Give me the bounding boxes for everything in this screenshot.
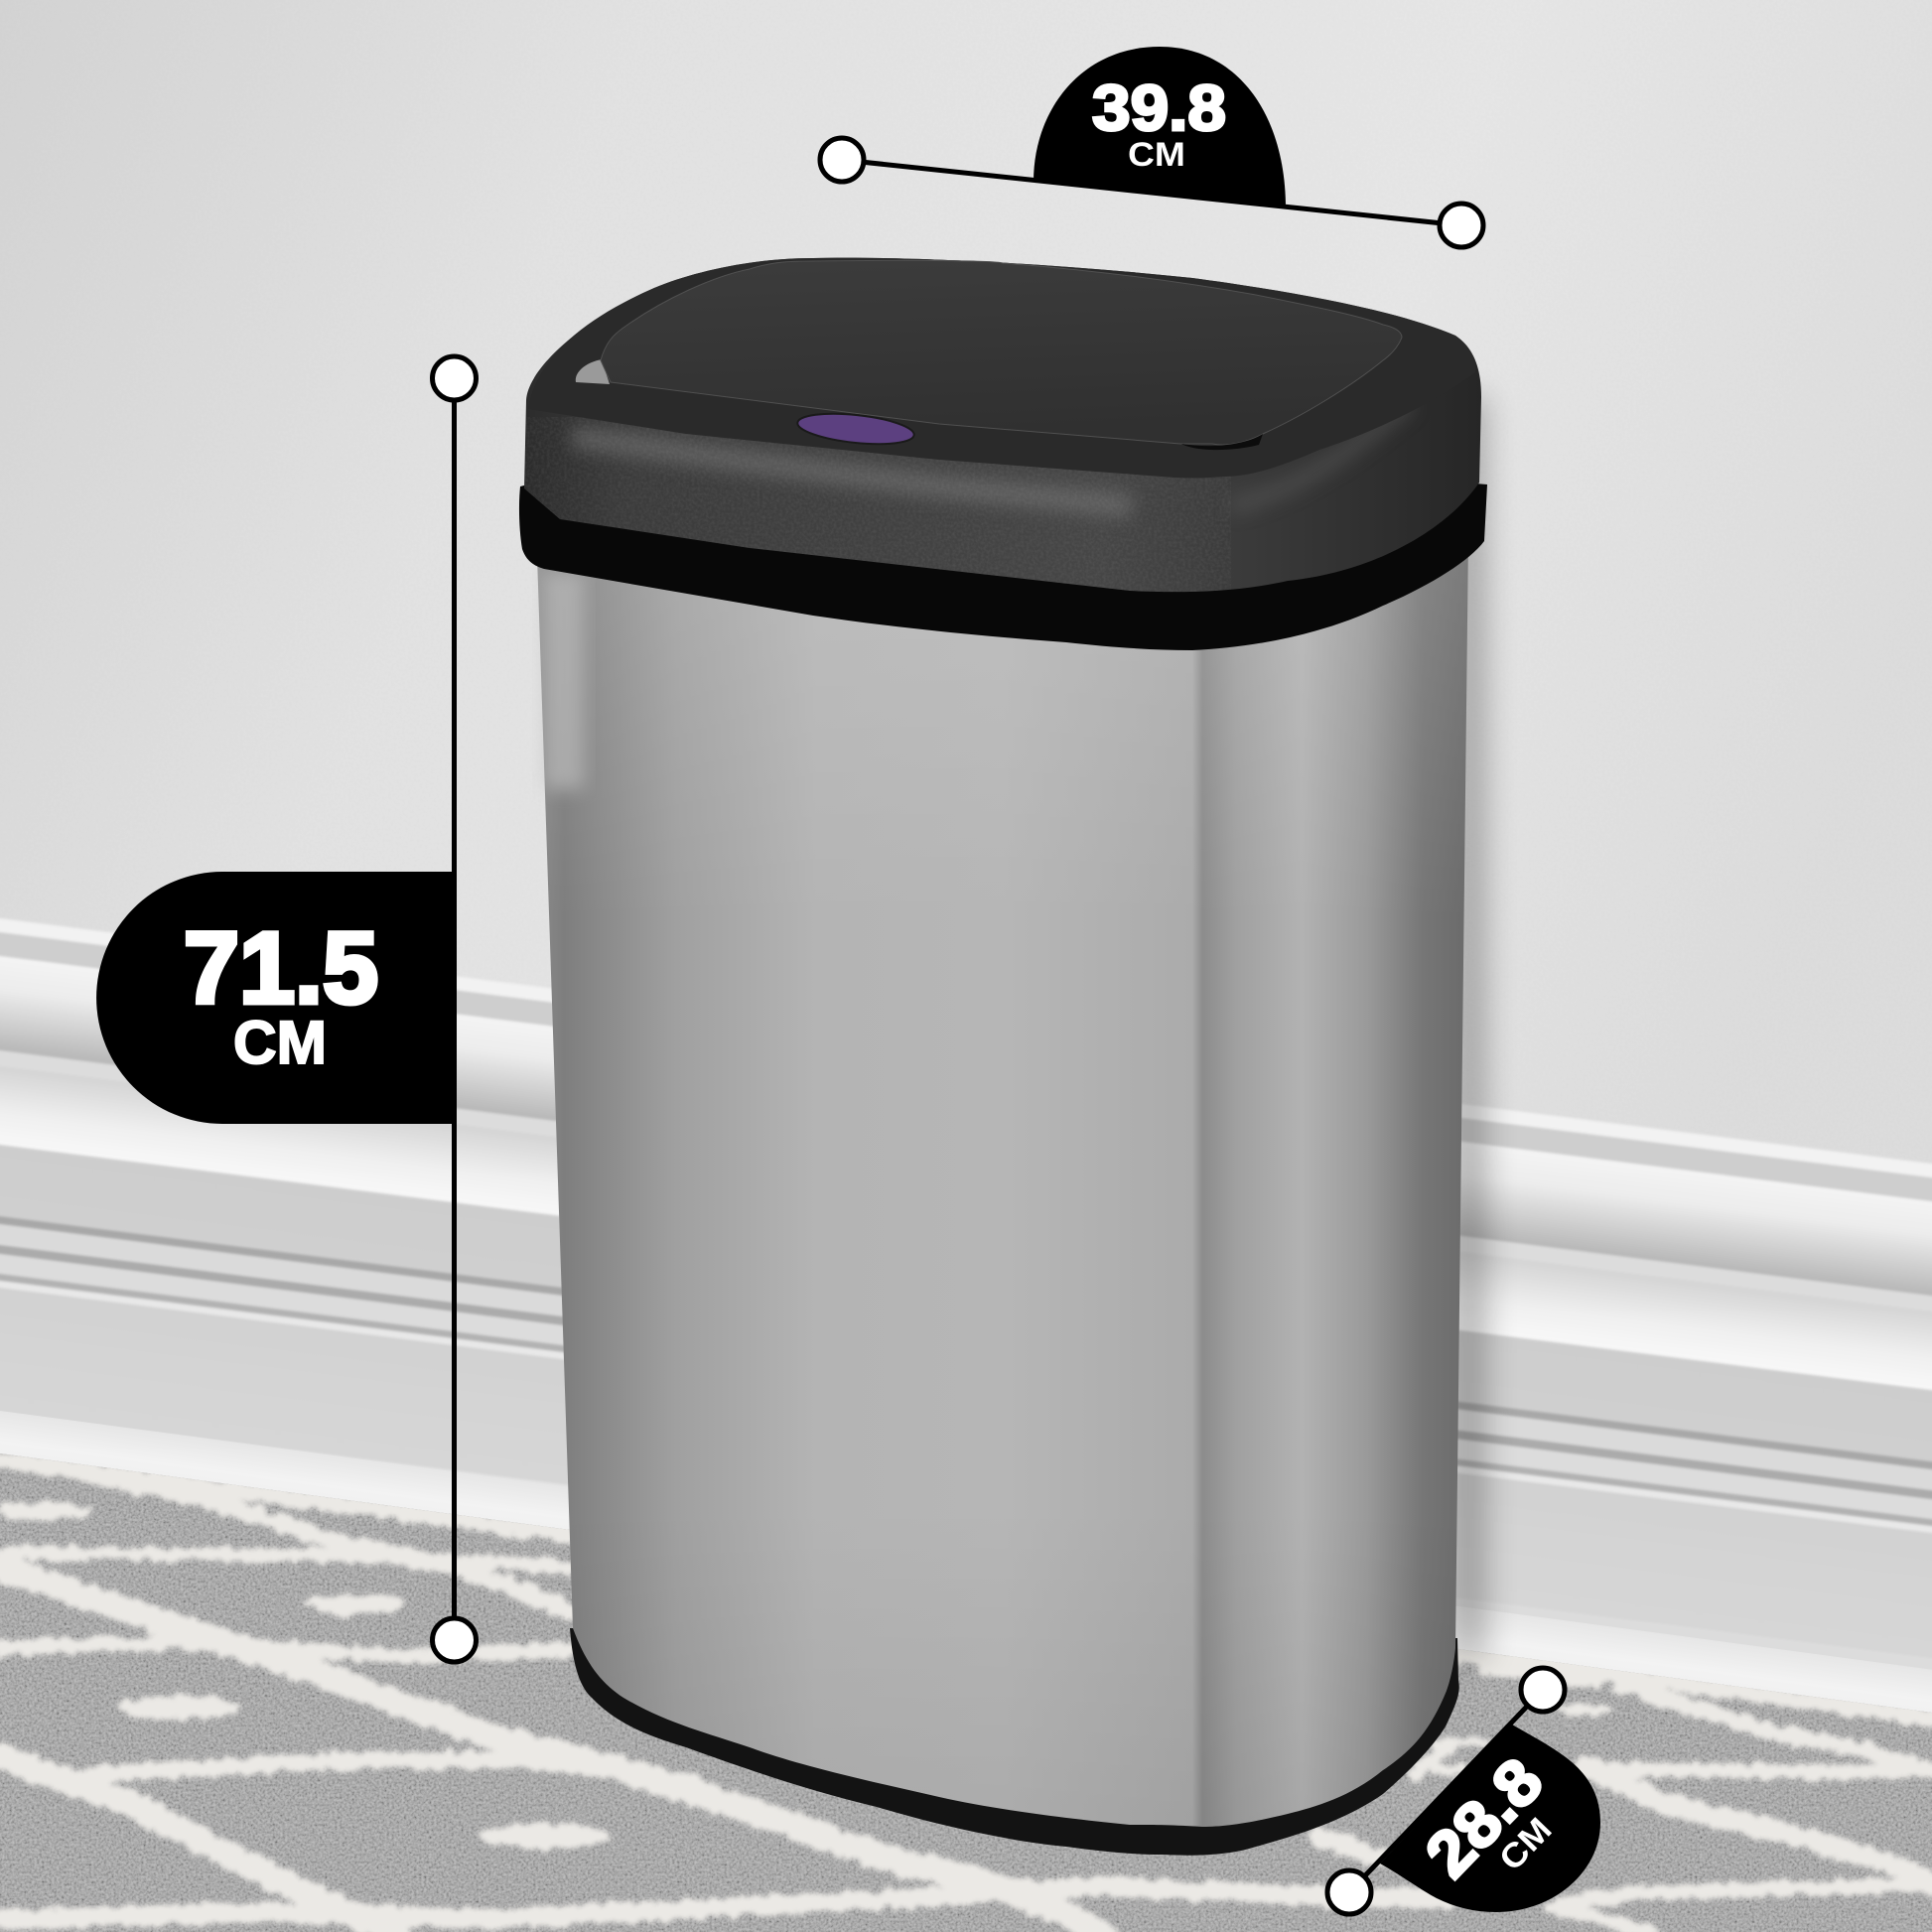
silver slot — [576, 359, 610, 384]
width dimension 39.8 cm — [820, 47, 1483, 247]
lid hinged flap — [601, 260, 1402, 445]
lid collar band — [519, 467, 1487, 650]
depth unit: CM — [1492, 1811, 1560, 1878]
carpet — [0, 1430, 1932, 1932]
sensor window — [796, 409, 915, 449]
shadow beside bin — [1451, 397, 1485, 1658]
width line — [842, 160, 1461, 225]
bin base ring — [570, 1628, 1459, 1856]
depth bottom marker — [1327, 1870, 1371, 1914]
lid side highlight — [516, 402, 1410, 596]
stainless steel body — [537, 536, 1468, 1827]
lid housing — [516, 258, 1481, 596]
skirting board — [0, 910, 1932, 1666]
height top marker — [433, 356, 477, 400]
height dimension 71.5 cm — [96, 356, 476, 1662]
height unit: CM — [233, 1009, 327, 1076]
floor edge strip — [0, 1411, 1932, 1722]
height bottom marker — [433, 1618, 477, 1662]
width right marker — [1440, 204, 1483, 247]
carpet motifs — [0, 1502, 611, 1849]
waste bin — [516, 258, 1487, 1856]
lid top surface — [528, 258, 1475, 479]
depth label dome — [1380, 1725, 1600, 1912]
height label pill — [96, 872, 456, 1124]
height line — [452, 378, 457, 1640]
width unit: CM — [1128, 136, 1185, 174]
height value: 71.5 — [184, 911, 378, 1025]
depth top marker — [1521, 1668, 1565, 1712]
right slot shadow — [1181, 434, 1263, 450]
width value: 39.8 — [1092, 71, 1226, 144]
width left marker — [820, 138, 864, 182]
carpet pattern — [0, 1458, 1932, 1932]
depth value: 28.8 — [1411, 1744, 1557, 1891]
depth dimension 28.8 cm — [1327, 1668, 1600, 1914]
depth line — [1349, 1690, 1543, 1892]
width label dome — [1034, 47, 1286, 208]
